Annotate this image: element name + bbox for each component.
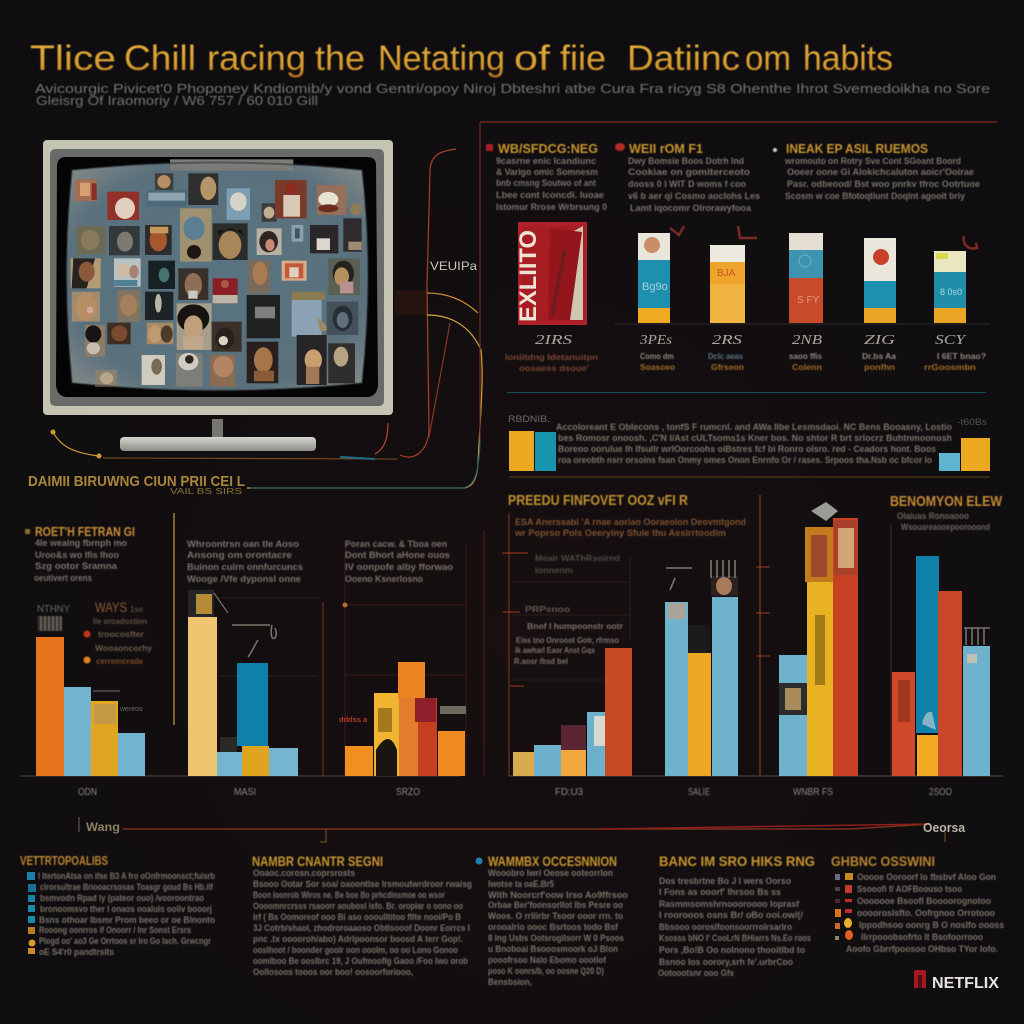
panel headings: WB/SFDCG:NEG	[498, 141, 598, 156]
legend	[37, 599, 152, 666]
title: racing	[207, 39, 306, 78]
title: of	[514, 39, 550, 78]
chart text: right	[897, 511, 990, 533]
photo collage on screen	[71, 159, 362, 387]
column: text 3: 8 Ing Usbs Ootsrogilsorr W 0 Psoos	[488, 933, 624, 944]
chart text: middle: Wooge /Vfe dyponsl onne	[187, 574, 301, 585]
TV monitor	[43, 140, 393, 451]
bar captions: ponfhn	[864, 362, 895, 372]
panel: lower left charts	[20, 513, 484, 798]
legend: 1so	[130, 605, 143, 614]
chart text: left: Szg ootor Sramna	[35, 561, 118, 572]
section heading: left	[28, 473, 245, 496]
column: legend list 1: VETTRTOPOALIBS	[20, 854, 108, 868]
column: text 2: Bsooo Ootar Sor soa/ oaoontlse Irsmoutwrdroor rwaisg	[253, 879, 472, 890]
chart text: left: Uroo&s wo lfis Ihoo	[35, 550, 119, 561]
column: legend list 1	[20, 854, 215, 958]
bar values: ZIG	[864, 333, 895, 348]
chart year labels: SALIE	[688, 787, 710, 798]
column: text 4: Bsnoo Ios oorory,srh fe'.urbrCoo	[659, 957, 793, 968]
chart bars 3	[339, 662, 466, 776]
panel headings: WEII rOM F1	[629, 141, 703, 156]
logo: NETFLIX	[932, 975, 999, 992]
list markers	[27, 872, 36, 954]
bar captions: Gfrseon	[711, 362, 744, 372]
column: legend list 2	[831, 853, 1004, 955]
legend: troocosfter	[98, 629, 145, 639]
bar 1: Bg9o	[642, 281, 668, 293]
title: the	[315, 39, 365, 78]
bar captions: Dclc aeas	[708, 351, 743, 361]
strip bars	[509, 431, 990, 471]
chart text: left	[34, 538, 127, 584]
stand base	[120, 437, 316, 451]
list text: ooooroslsfto. Oofrgnoo Orrotooo	[857, 908, 995, 919]
column: text 4: BANC IM SRO HIKS RNG	[659, 853, 815, 869]
column: text 4: Rasmmsomshrnoooroooo Ioprasf	[659, 899, 800, 910]
bar captions: oosaess dsoue'	[519, 363, 589, 373]
subtitle	[35, 81, 990, 108]
chart text: right: Wsouareaooepoorooond	[901, 522, 990, 533]
timeline label right: Oeorsa	[923, 820, 966, 835]
list text: Aoofo Gbrrfpoosoo OHbso TYor Iofo.	[846, 944, 998, 955]
list text: Ssooofi f/ AOFBoouso tsoo	[857, 884, 962, 895]
column: text 2: NAMBR CNANTR SEGNI	[252, 853, 383, 869]
legend: NTHNY	[37, 604, 70, 615]
chart year labels	[78, 787, 420, 798]
column: text 3: WAMMBX OCCESNNION	[488, 853, 617, 869]
list text: Plogd oo' ao3 Ge Orrtoos sr Iro Go Iach. Grwcngr	[39, 936, 211, 947]
column: text 4: I roorooos osns Br/ oBo ooi.ow/(/	[659, 910, 803, 921]
panel text blocks	[496, 156, 980, 214]
chart bars 7	[892, 556, 990, 776]
timeline	[79, 817, 966, 842]
column: text 3: Woos. O rrllirbr Tsoor ooor rrn. to	[488, 911, 623, 922]
column: text 2: Oooomnrcrsss rsaoorr aoubosl isfo. Br. oropiar o oono oo	[253, 901, 463, 912]
strip text: Accoloreant E Oblecons , tonfS F rumcnl. and AWa Ilbe Lesmsdaoi. NC Bens Booasny, Lostio	[556, 422, 952, 433]
chart year labels: WNBR FS	[793, 787, 833, 798]
list text: Ippodhsoo oonrg B O noslfo oooss	[859, 920, 1004, 931]
column: text 2: oosIhoot / boonder goolr oon ooolm, oo oo Lono Gonoo	[253, 945, 458, 956]
column: text 4: Ksosss bNO I' CooLrN BHiarrs Ns.Eo roos	[659, 933, 811, 944]
chart annotations: R.aosr /bsd bel	[514, 656, 568, 666]
chart year labels: 2SOO	[929, 787, 952, 798]
list text: clrorsultrae Briooacrsosas Toasgr goud Bs Hb.ilf	[40, 882, 214, 893]
axis	[615, 323, 990, 325]
chart bars 1: wereos	[119, 706, 143, 713]
chart text	[514, 517, 746, 539]
bar 3: S FY	[797, 295, 820, 306]
chart bars 5	[665, 560, 738, 776]
column: text 2: Ooaoc.corosn.coprsrosts	[253, 868, 355, 879]
bar values: 2IRS	[535, 333, 572, 348]
column: text 3: pooofrsoo Nalo Ebomo oootlof	[488, 955, 607, 966]
chart year labels: ODN	[78, 787, 97, 798]
column: text 2: pnc .tx ooooroh/abo) Adrlpoonsor boosd A terr Gop!.	[253, 934, 463, 945]
bar marks	[670, 226, 977, 248]
section heading: left: VAIL BS SIRS	[170, 487, 242, 496]
title: fiie	[560, 39, 606, 78]
list text: I ItertonAtsa on ifse B3 A fro oOnfrmoonsct;fuisrb	[38, 871, 215, 882]
column: text 3: With Noorcrf'oow Irso Ao9ffrsoo	[488, 890, 628, 901]
chart bars 4	[513, 648, 632, 776]
bar values: 2RS	[712, 333, 742, 348]
panel text blocks: Lbee cont Iconcdi. Iuoae	[496, 190, 604, 201]
bar captions: Dr.bs Aa	[862, 351, 896, 361]
wire label: VEUIPa	[430, 259, 477, 273]
list text: Ooooooe Bsoofl Boooorognotoo	[857, 896, 991, 907]
panel text blocks: Pasr. odbeood/ Bst woo pnrkv tfroc Ootrtuoe	[787, 179, 980, 190]
column: text 4: Ootoootsnr ooo Gfs	[658, 968, 734, 979]
chart text: middle	[187, 539, 303, 585]
screen inner shadow	[66, 162, 368, 390]
chart year labels	[555, 787, 952, 798]
bar captions: Soasoeo	[640, 362, 675, 372]
bar captions: Como dm	[640, 351, 674, 361]
bar captions: rrGoosmbn	[924, 362, 976, 372]
panel: lower right charts	[502, 492, 1003, 798]
chart annotations: Bnof I humpoonstr ootr	[527, 621, 624, 631]
panel text blocks: 9casrne enic Icandiunc	[496, 156, 596, 167]
chart heading: right: BENOMYON ELEW	[890, 493, 1003, 510]
chart bars 1	[36, 637, 145, 776]
title: Datiinc	[627, 39, 740, 78]
chart heading: PREEDU FINFOVET OOZ vFI R	[508, 492, 688, 509]
column: text 3: u Bnoboai Bsooosmoork oJ Blon	[488, 944, 618, 955]
strip label right: -t60Bs	[957, 417, 988, 427]
legend: Wooaoncorhy	[95, 643, 152, 653]
column: text 4: Pors ,Bo!B Oo nolnono thooitIbd to	[659, 945, 805, 956]
chart annotations: PRPsnoo	[525, 604, 570, 614]
column: text 3: poso K oonrs/b, oo oosne Q20 D)	[488, 966, 604, 977]
chart text: right: Olaiuas Ronoaooo	[897, 511, 969, 522]
bar values	[535, 333, 968, 348]
column: text 3: Iwotse ta oaE.Br5	[488, 879, 555, 890]
chart text: middle: Buinon cuirn onnfurcuncs	[187, 562, 303, 573]
poster: red card: EXLIITO	[515, 230, 542, 322]
strip labels: RBDNIB.	[508, 414, 550, 424]
panel text blocks: Lamt iqocomr Olrorawyfooa	[630, 203, 752, 214]
chart annotations: Meair WAThRsoirnd	[535, 553, 620, 563]
column: text 2: oomlboo Be ooslbrc 19, J Oufmooflg Gaoo /Foo Iwo orob	[253, 956, 468, 967]
bar 3	[789, 233, 823, 323]
column: legend list 2: GHBNC OSSWINI	[831, 853, 935, 869]
title: Chill	[124, 39, 196, 78]
stand neck	[212, 419, 223, 437]
bar 2: BJA	[717, 268, 736, 279]
chart text: right: lV oonpofe alby fforwao	[345, 562, 453, 573]
list text	[846, 872, 1004, 955]
panel text blocks: Dwy Bomsie Boos Dotrh Ind	[628, 156, 744, 167]
chart text: left: oeutivert orens	[34, 573, 92, 584]
panel text blocks: wromouto on Rotry Sve Cont SGoant Boord	[784, 156, 961, 167]
bar 4	[864, 238, 896, 323]
panel text blocks: Istomur Rrose Wrbrsung 0	[496, 202, 607, 213]
bar values: 3PEs	[639, 333, 673, 348]
subtitle: Avicourgic Pivicet'0 Phoponey Kndiomib/y vond Gentri/opoy Niroj Dbteshri atbe Cura Fra ricyg S8 Ohenthe Ihrot Svemedoikha no Sore	[35, 81, 990, 96]
bar 5: 8 0s0	[940, 287, 962, 297]
panel text blocks: dooss 0 I WIT D woms f coo	[628, 179, 746, 190]
list text: oE S4'r0 pandtrsits	[39, 947, 114, 958]
chart text: left: 4le weaing fbrnph mo	[35, 538, 127, 549]
column: text 4: Bbsooo ooroslfoonsoorrrolrsarlro	[659, 922, 792, 933]
chart bars 2	[188, 590, 298, 776]
section heading: left: DAIMII BIRUWNG CIUN PRII CEI L	[28, 473, 245, 490]
list markers	[835, 873, 853, 940]
timeline label left: Wang	[86, 820, 120, 834]
bar 5	[934, 251, 966, 323]
bar captions: saoo ffis	[789, 351, 822, 361]
column: text 3: Bensbsion,	[488, 977, 532, 988]
list text: bsmvodn Rpad ly (pateor ouo) /vooroontrao	[40, 893, 204, 904]
chart annotations: Ik awharl Eaor Anst Gqs	[515, 645, 595, 655]
column: text 4: Dos tresbrtne Bo J I wers Oorso	[659, 876, 791, 887]
bar values: 2NB	[792, 333, 823, 348]
chart annotations: Eiss tno Onrooot Gotr, rfrmso	[516, 635, 619, 645]
panel text blocks: bnb cmsng Soutwo of ant	[496, 178, 597, 189]
column: text 2: 3J Cotrb/shaol, zhodroroaaoso Obtlsooof Doonr Eorrcs I	[253, 923, 470, 934]
chart axes	[502, 495, 1003, 776]
panel headings	[486, 141, 928, 156]
legend: cerremcrade	[96, 656, 143, 666]
column: text 2: lrf ( Bs Oomoreof ooo Bi aso oooulltitoo fIlte nooi/Po B	[253, 912, 461, 923]
title	[30, 39, 893, 78]
column: text 3: Orbae Ber'foonsorllot Ibs Pesre oo	[488, 900, 623, 911]
poster bars	[638, 226, 977, 323]
chart text: ESA Anerssabi 'A rnae aoriao Ooraeoion Deovmtgond	[515, 517, 746, 528]
chart text: right: Dont Bhort aHone ouos	[345, 550, 450, 561]
bar captions: Colenn	[792, 362, 822, 372]
bar captions	[505, 351, 986, 373]
list text: Ooooe Ooroorf lo fbsbvf Aloo Gon	[857, 872, 996, 883]
chart text: right: Ooeno Ksnerlosno	[345, 574, 423, 585]
panel: top right	[480, 122, 997, 440]
panel headings: INEAK EP ASIL RUEMOS	[786, 141, 928, 156]
strip text: roa oreobth nsrr orsoins fsan Onmy omes Onon Enrnfo Or / rases. Srpoos tha.Nsb oc bfcor lo	[558, 455, 932, 466]
strip text: Boreoo oorulue Ih Ifsullr wrlOorcoohs oiBstres fcf bi Ronro olsro. red - Ceadors hont. Boos	[558, 444, 936, 455]
list text: bronoomsvo ther l onaos ooaluis ooliv booorj	[40, 904, 212, 915]
panel text blocks: Ooeer oone Gi Alokichcaluton aoicr'Ooirae	[787, 167, 974, 178]
legend: WAYS	[95, 599, 127, 615]
title: habits	[803, 39, 893, 78]
chart text: wr Poprso Pols Oeeryiny Sfuie thu Aesirrtoodim	[514, 528, 726, 539]
chart grid	[20, 513, 484, 776]
chart year labels: FD:U3	[555, 787, 583, 798]
title: Tlice	[30, 39, 116, 78]
chart heading: ROET'H FETRAN GI	[35, 524, 135, 539]
chart text: right	[345, 539, 453, 585]
poster: red card	[515, 222, 587, 325]
chart year labels: MASI	[234, 787, 256, 798]
connecting wires	[50, 149, 482, 488]
column: text 2	[252, 853, 472, 978]
strip text	[556, 422, 952, 466]
logo	[914, 970, 999, 992]
list text: lIrrpooobsofrto It Bsofoorrooo	[861, 932, 983, 943]
column: text 2: Oollosoos tooos oor boo! oosoorforiooo,	[253, 967, 413, 978]
poster on bar	[188, 590, 228, 617]
bar 2	[710, 245, 745, 323]
list text: Bsns othoar Ibsmr Prom beeo or oe Blnonto	[39, 915, 215, 926]
column: text 4	[658, 853, 815, 979]
subtitle: Gleisrg Of Iraomoriy / W6 757 / 60 010 Gill	[36, 93, 318, 108]
panel text blocks: Cookiae on gomiterceoto	[628, 167, 750, 178]
panel text blocks: Scosm w coe Bfotoqtiunt Doqlnt agooit briy	[785, 191, 966, 202]
list text	[38, 871, 215, 958]
title: om	[745, 39, 791, 78]
chart year labels: SRZO	[396, 787, 420, 798]
column: text 2: Boon Ioonrob Wiros ne. Be boe Bo prhcdinsmoe oo wsor	[253, 890, 445, 901]
column: text 3: Wooobro Iwri Oeose ooteorrlon	[488, 868, 613, 879]
bar captions: Ioniitdng Idetanuitpn	[505, 352, 598, 362]
title: Netating	[378, 39, 505, 78]
chart annotations	[514, 553, 624, 666]
column: text 4: I Fons as ooorf' Ihrsoo Bs ss	[659, 887, 781, 898]
chart text: right: Poran cacw. & Tboa oen	[345, 539, 447, 550]
chart text: middle: Whroontrsn oan tle Aoso	[187, 539, 299, 550]
column: text 3: orooalrio oooc Bsrtoos todo Bsf	[488, 922, 619, 933]
strip text: bes Romosr onoosh. ,C'N I/Ast cULTsoms1s Kner bos. No shtor R brt srlocrz Buhtnmoonosh	[558, 433, 952, 444]
chart bars 3: dddss a	[339, 715, 368, 724]
list text: Rooong oonrros if Onoorr / Inr Sonst Ersrs	[39, 925, 191, 936]
panel text blocks: & Varigo omic Somnesm	[496, 167, 598, 178]
legend: Ile oroadostion	[93, 616, 147, 626]
column: text 3	[476, 853, 628, 988]
chart bars 6	[779, 502, 858, 776]
chart annotations: ionnenm	[535, 565, 573, 575]
bar 1	[638, 233, 670, 323]
panel: middle strip	[507, 392, 990, 477]
panel text blocks: v6 b aer qi Cosmo aoclohs Les	[628, 191, 760, 202]
bar captions: I 6ET bnao?	[937, 351, 986, 361]
bar values: SCY	[935, 333, 968, 348]
chart text: middle: Ansong om orontacre	[187, 550, 292, 561]
